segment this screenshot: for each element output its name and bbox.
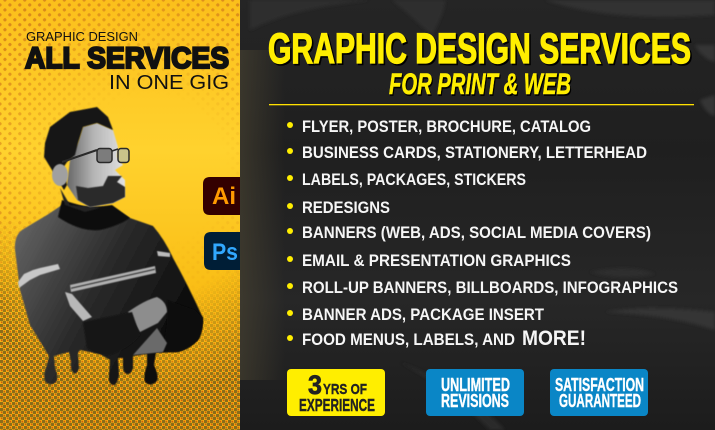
bullet list of services [287,117,678,350]
badge: 3 years of experience [287,369,385,416]
right sleeve stripe [157,251,170,257]
title: FOR PRINT & WEB [390,70,572,102]
sweater [15,205,203,385]
item 9 [287,327,586,350]
item 5: BANNERS (WEB, ADS, SOCIAL MEDIA COVERS) [302,223,651,242]
icon: adobe photoshop: Ps [212,239,238,266]
heading: graphic design all services in one gig: GRAPHIC DESIGN [26,29,138,44]
chest stripes [70,266,156,292]
face [67,123,125,207]
person portrait with dripping sweater [15,107,203,385]
hair [44,107,113,190]
badge: unlimited revisions [426,369,524,416]
ear [52,164,68,186]
item 3: LABELS, PACKAGES, STICKERS [302,170,526,189]
badge: unlimited revisions: REVISIONS [441,391,509,411]
icon: adobe photoshop [204,232,240,270]
arm folds [163,300,203,352]
badge: satisfaction guaranteed: SATISFACTION [555,375,644,395]
icon: adobe illustrator [203,177,240,215]
hand [65,292,92,321]
lower light forearm [133,328,167,355]
badge: 3 years of experience: YRS OF [323,381,367,398]
item 2: BUSINESS CARDS, STATIONERY, LETTERHEAD [302,143,647,162]
badge: unlimited revisions: UNLIMITED [441,375,510,395]
icon: adobe illustrator: Ai [212,183,236,210]
glasses [62,148,129,162]
panel: yellow halftone portrait panel [0,0,240,430]
item 1: FLYER, POSTER, BROCHURE, CATALOG [302,117,591,136]
heading: graphic design all services in one gig: ALL SERVICES [25,42,229,75]
title [268,25,692,102]
sleeve stripe left with logo [18,264,60,288]
badge: satisfaction guaranteed: GUARANTEED [559,391,641,411]
item 4: REDESIGNS [302,198,390,217]
heading: graphic design all services in one gig [25,29,229,94]
beard [76,176,125,207]
dark front forearm [83,312,140,355]
badge: 3 years of experience: EXPERIENCE [299,395,375,415]
collar [58,200,130,230]
badge: 3 years of experience: 3 [308,370,322,400]
item 6: EMAIL & PRESENTATION GRAPHICS [302,251,571,270]
light forearm [128,297,167,332]
heading: graphic design all services in one gig: IN ONE GIG [109,71,229,94]
item 7: ROLL-UP BANNERS, BILLBOARDS, INFOGRAPHICS [302,278,678,297]
item 9: MORE! [522,327,586,350]
neck [60,188,100,212]
item 9: FOOD MENUS, LABELS, AND [302,330,515,349]
title: FOR PRINT & WEB [389,68,571,101]
divider rule [269,104,694,105]
badge: satisfaction guaranteed [550,369,648,416]
item 8: BANNER ADS, PACKAGE INSERT [302,305,545,324]
